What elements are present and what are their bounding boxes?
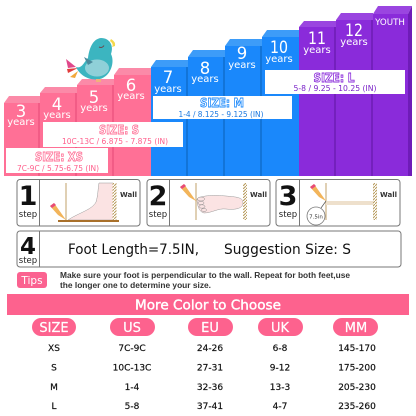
bar: youth: YOUTH bbox=[374, 18, 405, 28]
row: XS bbox=[48, 344, 376, 354]
text: tips body bbox=[60, 271, 351, 290]
bar: 5 years: years bbox=[80, 103, 108, 114]
text: tips body: Make sure your foot is perpendicular to the wall. Repeat for both feet,use bbox=[60, 271, 351, 280]
bar: 4 years bbox=[38, 87, 77, 176]
bar: 10 years: years bbox=[265, 54, 293, 65]
size label: XS: SIZE: XS bbox=[35, 149, 83, 164]
size label: XS bbox=[6, 148, 108, 173]
bar: 3 years: years bbox=[7, 117, 35, 128]
bar: 9 years: years bbox=[228, 60, 256, 71]
icon: measuring: 7.5in bbox=[309, 214, 323, 220]
text: suggestion size: Suggestion Size: S bbox=[224, 242, 351, 258]
bar: 12 years bbox=[334, 13, 373, 176]
row: XS: 6-8 bbox=[273, 344, 288, 354]
bar: 9 years: 9 bbox=[237, 44, 247, 63]
icon: measuring bbox=[307, 183, 397, 225]
bar: 5 years bbox=[75, 79, 114, 176]
row: M: 32-36 bbox=[197, 383, 223, 393]
bar: 4 years: years bbox=[43, 110, 71, 121]
panel: step 4 bbox=[17, 231, 401, 267]
row: L: 5-8 bbox=[125, 402, 140, 412]
size label: M: 1-4 / 8.125 - 9.125 (IN) bbox=[178, 110, 264, 119]
size label: L bbox=[265, 70, 405, 94]
bar: 11 years: years bbox=[303, 45, 331, 56]
text: foot length: Foot Length=7.5IN, bbox=[68, 242, 199, 258]
table header: MM bbox=[345, 321, 367, 336]
size label: L: SIZE: L bbox=[314, 70, 355, 85]
bar: youth bbox=[371, 6, 412, 176]
panel: step 4: 4 bbox=[20, 234, 36, 260]
row: L: 37-41 bbox=[197, 402, 223, 412]
panel: step 1 bbox=[17, 180, 140, 226]
bar: 10 years: 10 bbox=[270, 38, 288, 57]
bar: 7 years bbox=[151, 60, 188, 176]
bar: 8 years bbox=[186, 50, 225, 176]
row: L: 235-260 bbox=[338, 402, 376, 412]
banner: more color to choose bbox=[7, 294, 409, 315]
icon: foot top view: Wall bbox=[250, 191, 267, 199]
row: S bbox=[51, 364, 376, 374]
table header: UK bbox=[271, 321, 289, 336]
table header: US bbox=[123, 321, 141, 336]
bar: 7 years: 7 bbox=[163, 68, 173, 87]
bar: 3 years: 3 bbox=[16, 102, 26, 121]
panel: step 1: 1 bbox=[19, 181, 37, 212]
panel: step 1: step bbox=[19, 210, 37, 220]
bar: 9 years bbox=[223, 39, 262, 176]
panel: step 2: step bbox=[149, 210, 167, 220]
bar: 11 years bbox=[299, 21, 336, 176]
size label: L: 5-8 / 9.25 - 10.25 (IN) bbox=[294, 84, 376, 93]
banner: more color to choose: More Color to Choose bbox=[135, 298, 281, 314]
icon: foot against wall: Wall bbox=[120, 191, 137, 199]
chart: age bars bbox=[4, 6, 412, 176]
bar: 12 years: 12 bbox=[345, 21, 363, 40]
badge: tips bbox=[17, 272, 47, 288]
table: size chart bbox=[32, 318, 378, 412]
bar: 11 years: 11 bbox=[308, 29, 326, 48]
bar: 6 years: 6 bbox=[126, 76, 136, 95]
panel: step 4: step bbox=[19, 256, 37, 266]
row: S: 9-12 bbox=[270, 364, 290, 374]
bar: 3 years bbox=[4, 96, 40, 176]
row: XS: 145-170 bbox=[338, 344, 376, 354]
row: L bbox=[51, 402, 376, 412]
table header: SIZE bbox=[39, 321, 69, 336]
panel: step 2 bbox=[147, 180, 270, 226]
size label: M bbox=[153, 95, 292, 119]
row: S: 27-31 bbox=[197, 364, 223, 374]
panel: step 2: 2 bbox=[149, 181, 167, 212]
row: L: L bbox=[51, 402, 57, 412]
row: M: M bbox=[50, 383, 58, 393]
table header: EU bbox=[201, 321, 219, 336]
row: M: 13-3 bbox=[270, 383, 290, 393]
panel: step 3: 3 bbox=[279, 181, 297, 212]
row: S: S bbox=[51, 364, 57, 374]
size label: S: SIZE: S bbox=[99, 122, 139, 137]
bar: 12 years: years bbox=[340, 37, 368, 48]
row: XS: 7C-9C bbox=[118, 344, 146, 354]
row: S: 10C-13C bbox=[113, 364, 151, 374]
panel: step 3 bbox=[276, 180, 400, 226]
table header bbox=[32, 318, 378, 336]
bar: 7 years: years bbox=[154, 84, 182, 95]
row: M bbox=[50, 383, 376, 393]
bar: 6 years bbox=[112, 68, 151, 176]
row: XS: 24-26 bbox=[197, 344, 223, 354]
bar: 10 years bbox=[260, 30, 300, 176]
size label: XS: 7C-9C / 5.75-6.75 (IN) bbox=[17, 164, 99, 173]
icon: measuring: Wall bbox=[380, 191, 397, 199]
bar: 4 years: 4 bbox=[52, 95, 62, 114]
bar: 8 years: years bbox=[191, 74, 219, 85]
badge: tips: Tips bbox=[20, 275, 43, 287]
row: M: 205-230 bbox=[338, 383, 376, 393]
text: tips body: the longer one to determine your size. bbox=[60, 281, 211, 290]
size label: S: 10C-13C / 6.875 - 7.875 (IN) bbox=[62, 137, 168, 146]
row: XS: XS bbox=[48, 344, 60, 354]
bar: 8 years: 8 bbox=[200, 59, 210, 78]
row: S: 175-200 bbox=[338, 364, 376, 374]
row: L: 4-7 bbox=[273, 402, 287, 412]
size label: S bbox=[43, 122, 183, 147]
panel: step 3: step bbox=[279, 210, 297, 220]
size label: M: SIZE: M bbox=[200, 95, 244, 110]
icon: bird bbox=[66, 38, 115, 82]
bar: 5 years: 5 bbox=[89, 88, 99, 107]
bar: 6 years: years bbox=[117, 91, 145, 102]
row: M: 1-4 bbox=[125, 383, 140, 393]
